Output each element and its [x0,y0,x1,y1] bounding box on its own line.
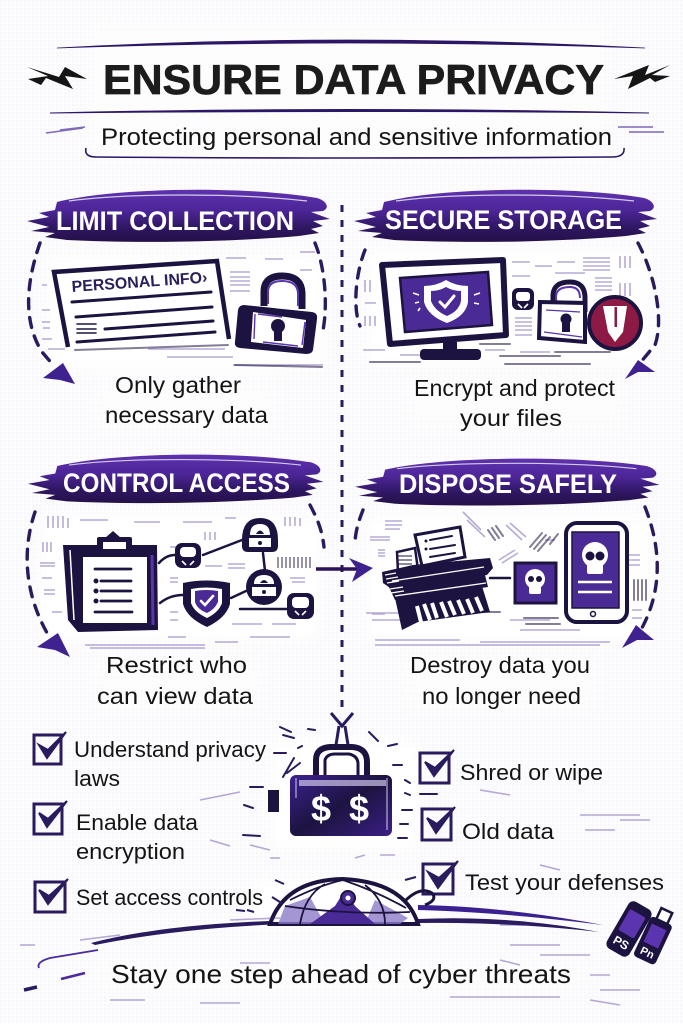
ground swoosh [91,921,300,945]
item: set access controls: Set access controls [76,885,263,910]
connector lines [159,540,287,609]
arrowhead right [625,360,655,379]
checklist left [34,732,266,912]
caption [105,372,268,428]
footer tagline: Stay one step ahead of cyber threats [111,959,571,989]
caption: Encrypt and protect [414,375,616,401]
title text: ENSURE DATA PRIVACY [103,56,604,103]
sketch streaks [366,512,642,645]
dashed arc left [356,250,365,326]
caption: can view data [97,683,253,709]
item: test your defenses [423,861,664,895]
item: enable data encryption: encryption [76,839,185,864]
subtitle [46,124,664,158]
dashed arc left [27,512,50,638]
item: test your defenses: Test your defenses [465,870,664,895]
sketch streaks [42,252,323,365]
shackle [316,747,367,776]
panel: dispose safely [355,459,660,709]
panel: secure storage [354,190,659,431]
caption: Destroy data you [410,652,590,678]
label: personal info: PERSONAL INFO› [71,270,208,296]
sketch streaks [40,516,305,648]
banner: limit collection [27,190,330,242]
icon: red warning badge [589,297,641,349]
globe dome and ground swoosh [24,877,603,990]
center dashed divider [340,205,344,712]
title header [27,40,670,113]
shredder [382,527,493,630]
radiating dashes [243,727,437,838]
sketch streaks [363,256,630,355]
icon: shield check [413,280,480,323]
caption: Restrict who [106,652,247,678]
icon: lock node top [242,518,278,552]
item: shred or wipe: Shred or wipe [460,760,603,785]
item: understand privacy laws: laws [74,766,120,791]
clipboard [63,531,158,632]
item: old data: Old data [462,819,555,844]
lock body [290,775,392,836]
banner: secure storage [354,190,657,242]
usb drives [604,899,678,966]
banner: limit collection: LIMIT COLLECTION [56,206,294,236]
panel: control access [27,455,324,709]
arrowhead right [622,625,654,648]
caption [410,652,590,709]
monitor [382,260,506,360]
paper sheet [415,527,465,566]
caption [414,375,616,431]
caption [97,652,253,709]
dashed arc left [355,510,363,545]
icon: small lock node [175,543,201,568]
sketch streaks lower [20,790,650,1005]
item: understand privacy laws [34,732,266,791]
dashed arc right [638,243,659,363]
dashed arc left [29,243,54,366]
banner: dispose safely [355,459,660,506]
central money padlock [243,713,437,838]
dashed arc right [315,243,325,335]
subtitle: Protecting personal and sensitive information [101,124,612,151]
checklist right [420,750,664,895]
icon: padlock [539,282,585,342]
banner: control access [28,455,323,503]
item: understand privacy laws: Understand privacy [74,737,266,762]
arrowhead left [43,363,75,384]
icon: shield check [183,580,230,627]
dashed arc right [638,507,657,635]
icon: skull card [515,563,556,603]
dome [270,879,418,924]
banner: control access: CONTROL ACCESS [63,468,290,498]
panel: limit collection [27,190,330,428]
dashed arc right [310,505,324,547]
icon: phone with skull [566,523,627,622]
item: shred or wipe [420,750,603,785]
icon: left lightning bolt [27,67,87,89]
icon: small lock node right [287,593,314,619]
icon: right lightning bolt [614,65,670,89]
central money padlock: $ [349,788,369,829]
item: enable data encryption: Enable data [76,810,199,835]
form card [54,261,229,347]
usb drive one: PS [611,933,631,953]
item: enable data encryption [34,801,199,864]
small tag [268,790,279,812]
icon: lock node middle [246,569,282,605]
caption: Only gather [115,372,241,398]
usb drive two: Pn [638,945,656,962]
caption: your files [460,405,562,431]
arrow: center to dispose [316,558,373,582]
banner: secure storage: SECURE STORAGE [385,205,622,235]
arrowhead left [37,633,70,657]
y-shaped connector [331,713,353,745]
caption: no longer need [422,683,581,709]
dollar signs: $ [311,788,331,829]
banner: dispose safely: DISPOSE SAFELY [399,469,617,499]
item: set access controls [35,879,263,912]
item: old data [422,807,555,844]
connector line [490,577,510,579]
icon: padlock [235,276,317,354]
icon: small key fob [512,288,534,310]
caption: necessary data [105,402,268,428]
